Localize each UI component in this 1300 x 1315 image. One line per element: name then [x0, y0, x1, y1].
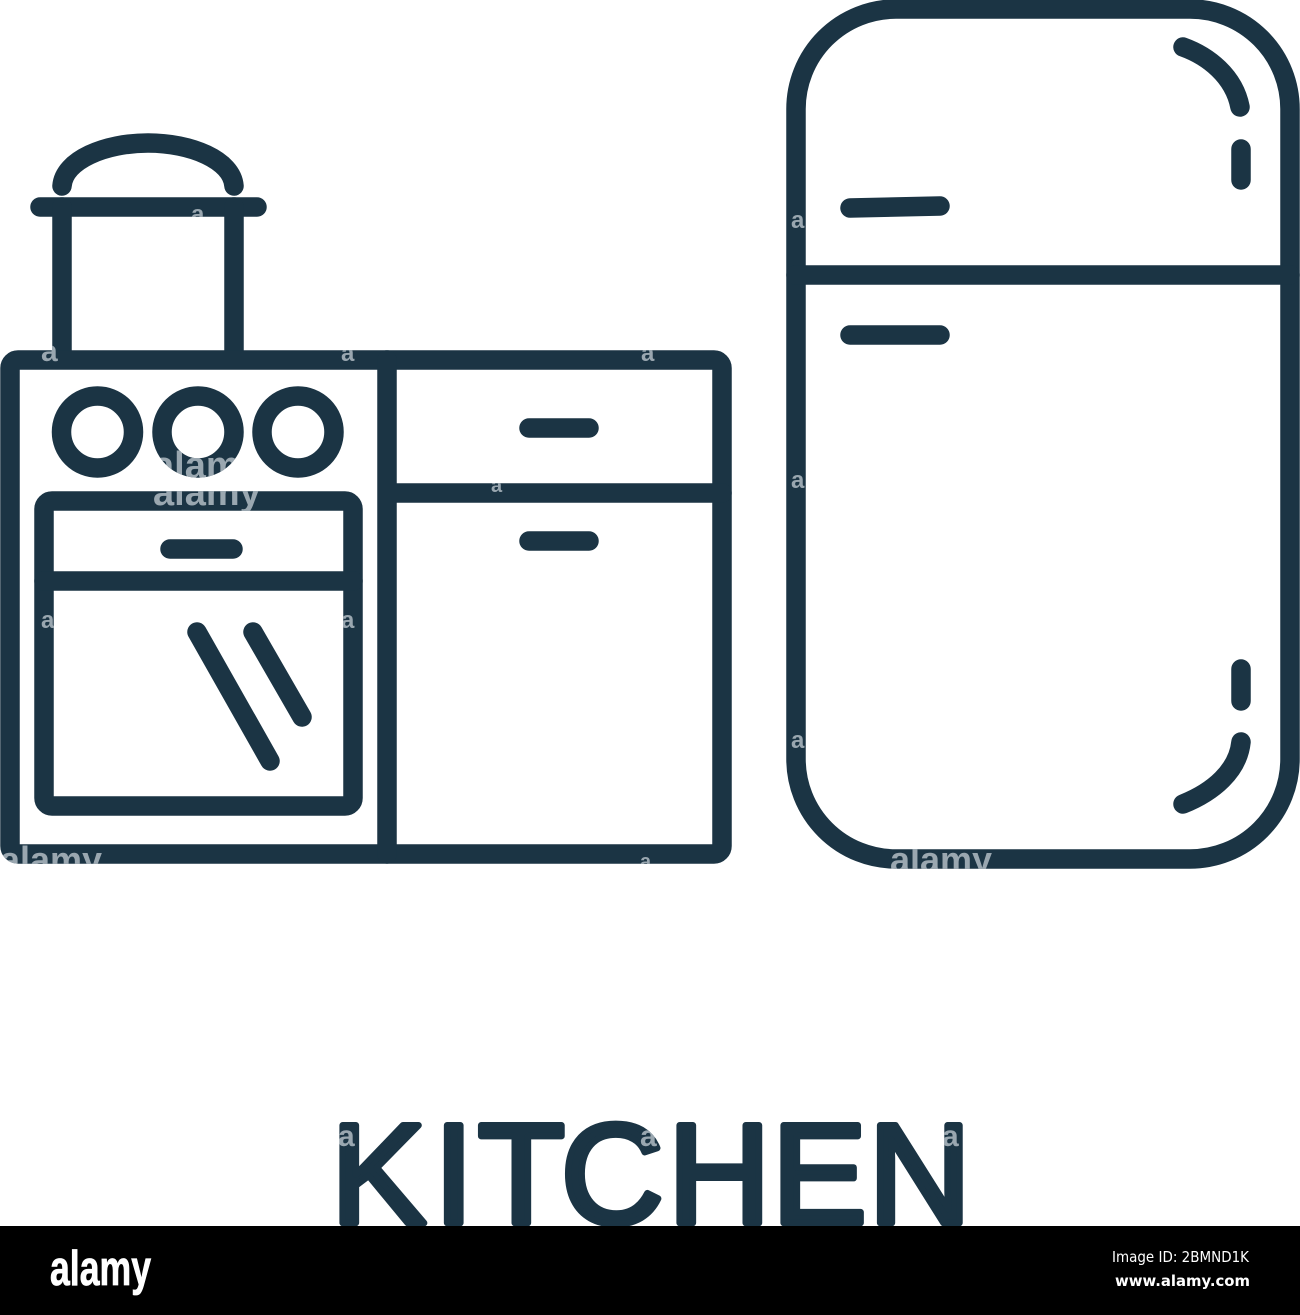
watermark [0, 201, 992, 1153]
watermark: a [191, 201, 205, 228]
watermark: a [640, 1120, 657, 1153]
pot [40, 143, 257, 358]
watermark: a [942, 1120, 959, 1153]
watermark: a [641, 340, 655, 367]
watermark: a [791, 727, 805, 754]
kitchen icon: stove and cabinet [10, 143, 722, 854]
watermark: alamy [153, 445, 261, 487]
watermark: a [338, 1120, 355, 1153]
oven [44, 501, 353, 806]
cabinet dividers [387, 360, 722, 854]
watermark: a [791, 207, 805, 234]
burners [62, 396, 334, 468]
watermark: a [41, 335, 58, 368]
counter body [10, 360, 722, 854]
website: www.alamy.com [1115, 1272, 1250, 1290]
fridge highlights [1183, 47, 1241, 804]
watermark: a [640, 851, 652, 873]
fridge body [796, 9, 1290, 859]
watermark: a [341, 607, 355, 634]
footer logo: alamy [50, 1242, 151, 1296]
stock photo footer bar [0, 1226, 1300, 1315]
watermark: alamy [890, 839, 992, 880]
fridge icon [796, 9, 1290, 859]
title: KITCHEN [331, 1095, 971, 1254]
fridge door divider [796, 265, 1290, 285]
fridge handles [850, 206, 940, 335]
watermark: alamy [0, 839, 102, 880]
watermark: a [341, 340, 355, 367]
image id: Image ID: 2BMND1K [1112, 1248, 1250, 1266]
watermark: a [41, 607, 55, 634]
watermark: a [491, 475, 503, 497]
cabinet handles [529, 428, 589, 541]
watermark: alamy [153, 472, 261, 514]
watermark: a [791, 467, 805, 494]
